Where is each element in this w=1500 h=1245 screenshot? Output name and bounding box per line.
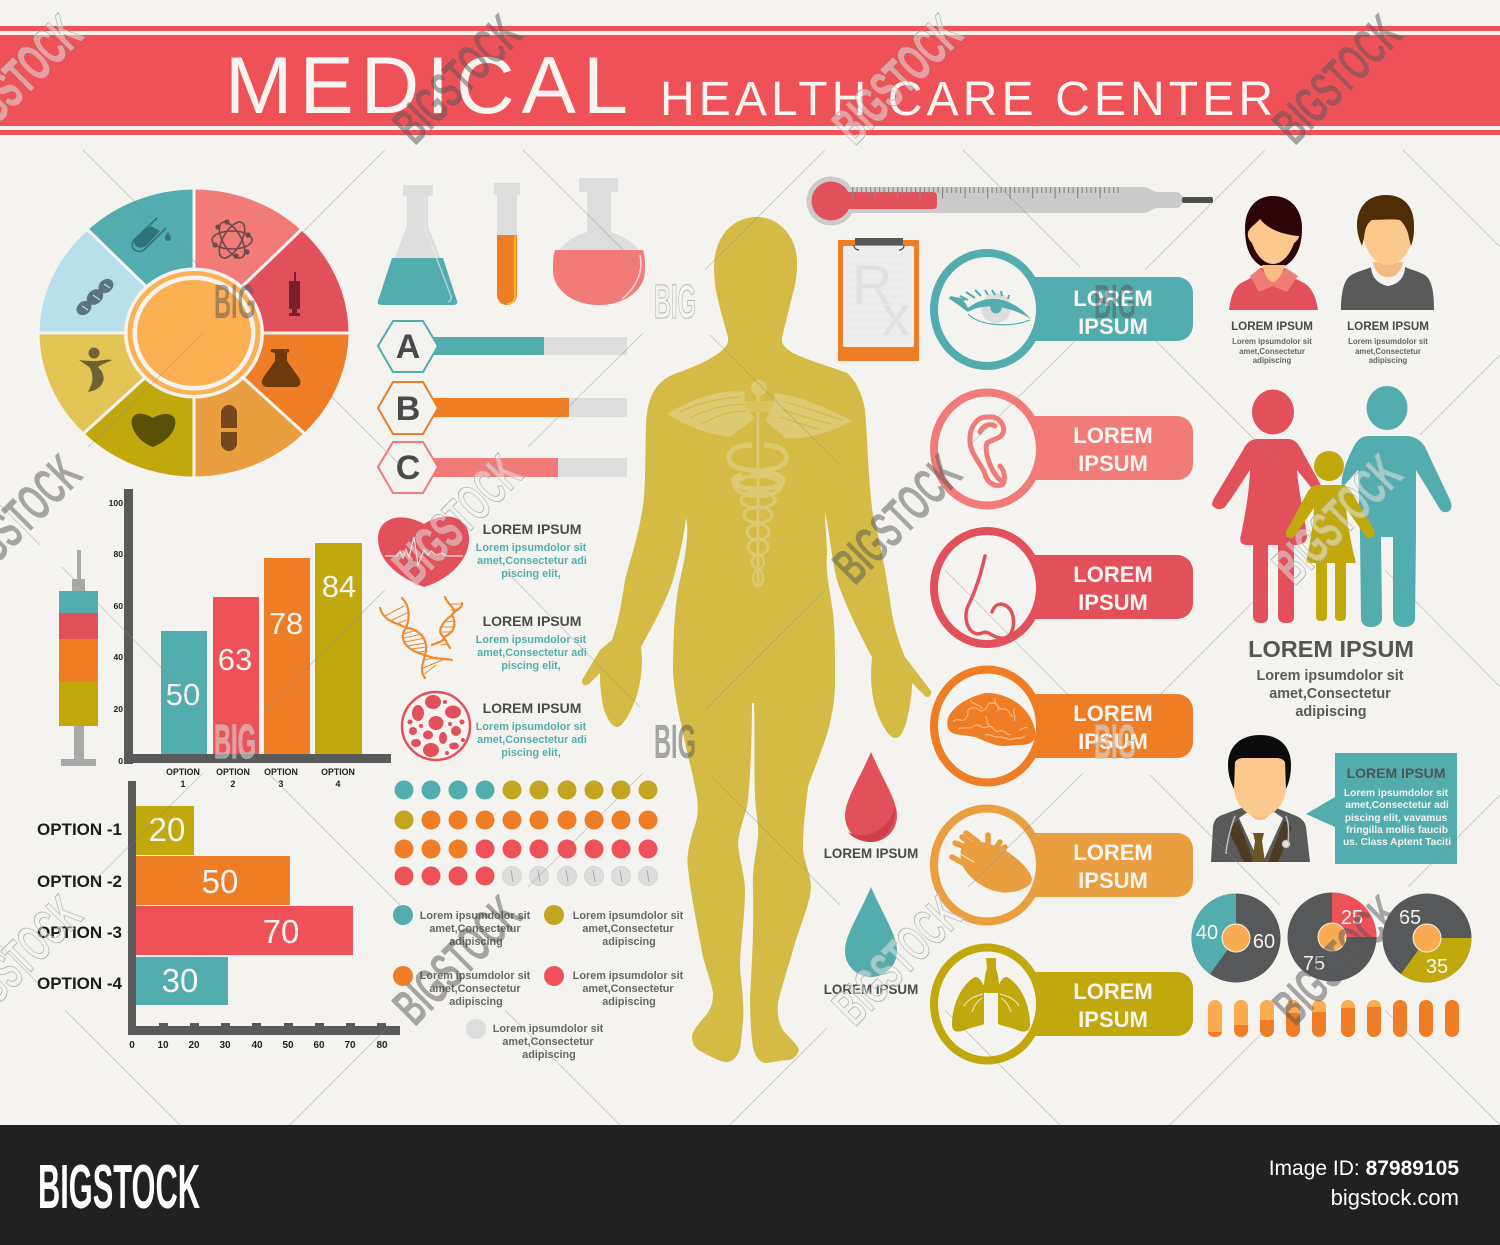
text block: dna — [476, 613, 587, 672]
legend: olive: Lorem ipsumdolor sit — [573, 910, 684, 922]
human body silhouette with caduceus — [582, 217, 931, 1063]
family pictogram: amet,Consectetur — [1269, 686, 1391, 702]
icon: atom — [212, 218, 252, 262]
icon: brain — [947, 693, 1035, 746]
man avatar: amet,Consectetur — [1355, 347, 1421, 356]
vertical bar chart: OPTION — [216, 767, 250, 777]
figure: mother — [1212, 390, 1322, 623]
text block: cell: Lorem ipsumdolor sit — [476, 721, 587, 733]
title banner — [0, 26, 1500, 135]
syringe gauge — [59, 550, 98, 766]
progress bar C: C — [396, 449, 420, 487]
text block: cell: LOREM IPSUM — [483, 700, 581, 716]
family pictogram: LOREM IPSUM — [1248, 636, 1414, 662]
legend: red: Lorem ipsumdolor sit — [573, 970, 684, 982]
horizontal bar chart: 30 — [162, 962, 198, 999]
horizontal bar chart: 70 — [263, 913, 299, 950]
man avatar: LOREM IPSUM — [1347, 320, 1429, 333]
woman avatar: LOREM IPSUM — [1231, 320, 1313, 333]
clipboard prescription — [838, 238, 919, 361]
legend: olive — [544, 905, 684, 948]
pie chart 25/75: 75 — [1303, 953, 1325, 975]
vertical bar chart: 1 — [181, 779, 186, 789]
watermark overlay: BIG — [654, 716, 696, 769]
horizontal bar chart: 20 — [149, 811, 185, 848]
footer site url: bigstock.com — [1331, 1185, 1459, 1210]
legend: orange: adipiscing — [449, 996, 503, 1008]
man avatar: adipiscing — [1369, 356, 1408, 365]
badge: heart organ — [934, 808, 1193, 922]
watermark overlay: BIG — [214, 716, 256, 769]
icon: syringe — [289, 272, 300, 316]
badge: nose: IPSUM — [1078, 590, 1148, 615]
pie chart 25/75 — [1288, 892, 1376, 982]
badge: heart organ: LOREM — [1073, 840, 1153, 865]
family pictogram — [1212, 386, 1451, 720]
vertical bar chart: 63 — [218, 642, 252, 677]
watermark overlay: BIG — [1094, 276, 1136, 329]
icon: heart — [132, 414, 175, 447]
figure: child — [1286, 451, 1375, 621]
legend: teal: amet,Consectetur — [429, 923, 521, 935]
man avatar — [1341, 195, 1434, 365]
horizontal bar chart: 50 — [282, 1040, 294, 1051]
watermark overlay: BIGSTOCK — [382, 444, 533, 595]
pie chart 40/60 — [1192, 894, 1280, 982]
speech callout — [1306, 753, 1457, 864]
text block: dna: LOREM IPSUM — [483, 613, 581, 629]
woman avatar: adipiscing — [1253, 356, 1292, 365]
figure: father — [1342, 386, 1451, 627]
vertical bar chart: 3 — [279, 779, 284, 789]
caduceus — [667, 380, 853, 586]
vertical bar chart: 80 — [113, 549, 123, 559]
text block: heart: LOREM IPSUM — [483, 521, 581, 537]
vertical bar chart: 100 — [109, 498, 123, 508]
badge: eye — [934, 253, 1193, 366]
watermark overlay: BIG — [1094, 716, 1136, 769]
badge: ear: IPSUM — [1078, 451, 1148, 476]
blood drop: LOREM IPSUM — [824, 846, 918, 861]
watermark overlay: BIGSTOCK — [822, 885, 973, 1036]
clipboard prescription: x — [882, 284, 910, 347]
legend: orange: Lorem ipsumdolor sit — [420, 970, 531, 982]
icon: figure — [79, 348, 112, 392]
badge: brain: IPSUM — [1078, 729, 1148, 754]
progress bar A: A — [396, 328, 420, 366]
text block: dna: Lorem ipsumdolor sit — [476, 634, 587, 646]
icon: nose — [966, 556, 1014, 638]
pill dot matrix — [394, 780, 658, 886]
badge: lungs: IPSUM — [1078, 1007, 1148, 1032]
text block: dna: amet,Consectetur adi — [477, 647, 587, 659]
vertical bar chart: OPTION — [264, 767, 298, 777]
watermark overlay: BIGSTOCK — [1262, 444, 1413, 595]
woman avatar: Lorem ipsumdolor sit — [1232, 337, 1312, 346]
lab round flask — [553, 178, 645, 305]
vertical bar chart: 60 — [113, 601, 123, 611]
woman avatar — [1229, 196, 1318, 365]
horizontal bar chart: OPTION -3 — [37, 923, 122, 942]
icon: lungs — [952, 958, 1030, 1032]
legend: white: amet,Consectetur — [502, 1036, 594, 1048]
pie chart 25/75: 25 — [1341, 907, 1363, 929]
family pictogram: Lorem ipsumdolor sit — [1256, 668, 1404, 684]
text block: dna: piscing elit, — [501, 660, 561, 672]
badge: eye: LOREM — [1073, 286, 1153, 311]
watermark overlay: BIGSTOCK — [1262, 885, 1413, 1036]
legend: red: amet,Consectetur — [582, 983, 674, 995]
badge: ear — [934, 392, 1193, 506]
legend: red: adipiscing — [602, 996, 656, 1008]
text block: cell — [476, 700, 587, 759]
badge: brain — [934, 670, 1193, 782]
badge: lungs — [934, 948, 1193, 1060]
water drop — [824, 887, 918, 997]
badge: nose — [934, 531, 1193, 644]
icon: eye — [948, 290, 1031, 325]
vertical bar chart: 20 — [113, 704, 123, 714]
legend: red — [544, 966, 684, 1008]
icon: ear — [970, 417, 1004, 486]
badge: nose: LOREM — [1073, 562, 1153, 587]
capsule progress row — [1208, 1000, 1459, 1037]
icon: anatomical heart — [952, 833, 1032, 892]
text block: heart: Lorem ipsumdolor sit — [476, 542, 587, 554]
thermometer — [806, 176, 1213, 226]
pie chart 40/60: 40 — [1196, 922, 1218, 944]
icon: flask — [262, 349, 300, 387]
horizontal bar chart: OPTION -2 — [37, 872, 122, 891]
doctor avatar — [1211, 735, 1310, 862]
horizontal bar chart: 80 — [376, 1040, 388, 1051]
vertical bar chart: OPTION — [321, 767, 355, 777]
speech callout: us. Class Aptent Taciti — [1343, 837, 1451, 848]
pie chart 40/60: 60 — [1253, 931, 1275, 953]
footer bar: BIGSTOCK — [38, 1153, 200, 1222]
legend: teal — [393, 905, 531, 948]
clipboard prescription: R — [852, 253, 892, 316]
horizontal bar chart — [37, 781, 400, 1051]
vertical bar chart: 0 — [118, 756, 123, 766]
legend: orange — [393, 966, 531, 1008]
watermark overlay: BIG — [214, 276, 256, 329]
woman avatar: amet,Consectetur — [1239, 347, 1305, 356]
watermark overlay: BIGSTOCK — [382, 885, 533, 1036]
progress bar B — [378, 382, 627, 434]
vertical bar chart: 2 — [231, 779, 236, 789]
legend: white — [466, 1019, 604, 1061]
blood drop — [824, 752, 918, 861]
legend: olive: adipiscing — [602, 936, 656, 948]
vertical bar chart: 4 — [336, 779, 341, 789]
badge: lungs: LOREM — [1073, 979, 1153, 1004]
badge: brain: LOREM — [1073, 701, 1153, 726]
title: medical: MEDICAL — [225, 41, 628, 131]
lab test tube — [494, 183, 520, 305]
footer image id: Image ID: 87989105 — [1269, 1157, 1459, 1180]
vertical bar chart: 84 — [322, 569, 356, 604]
horizontal bar chart: 30 — [219, 1040, 231, 1051]
vertical bar chart: 78 — [269, 606, 303, 641]
text block: heart: piscing elit, — [501, 568, 561, 580]
horizontal bar chart: 10 — [157, 1040, 169, 1051]
horizontal bar chart: 40 — [251, 1040, 263, 1051]
vertical bar chart: 40 — [113, 652, 123, 662]
stethoscope — [1226, 816, 1290, 854]
legend: white: Lorem ipsumdolor sit — [493, 1023, 604, 1035]
lab flask: conical — [378, 185, 457, 305]
text block: cell: piscing elit, — [501, 747, 561, 759]
badge: heart organ: IPSUM — [1078, 868, 1148, 893]
speech callout: amet,Consectetur adi — [1345, 800, 1449, 811]
vertical bar chart — [109, 489, 391, 789]
horizontal bar chart: OPTION -4 — [37, 974, 123, 993]
text block: heart — [476, 521, 587, 580]
legend: teal: adipiscing — [449, 936, 503, 948]
badge: eye: IPSUM — [1078, 314, 1148, 339]
speech callout: piscing elit, vavamus — [1345, 813, 1448, 824]
speech callout: Lorem ipsumdolor sit — [1344, 788, 1449, 799]
horizontal bar chart: OPTION -1 — [37, 820, 122, 839]
man avatar: Lorem ipsumdolor sit — [1348, 337, 1428, 346]
watermark overlay: BIGSTOCK — [822, 444, 973, 595]
legend: orange: amet,Consectetur — [429, 983, 521, 995]
progress bar B: B — [396, 390, 420, 428]
water drop: LOREM IPSUM — [824, 982, 918, 997]
badge: ear: LOREM — [1073, 423, 1153, 448]
legend: teal: Lorem ipsumdolor sit — [420, 910, 531, 922]
icon: dna strands — [380, 597, 462, 678]
speech callout: LOREM IPSUM — [1347, 765, 1445, 781]
watermark overlay: BIG — [654, 276, 696, 329]
horizontal bar chart: 60 — [313, 1040, 325, 1051]
text block: cell: amet,Consectetur adi — [477, 734, 587, 746]
pie chart 65/35: 65 — [1399, 907, 1421, 929]
horizontal bar chart: 20 — [188, 1040, 200, 1051]
icon: heart with ecg — [378, 517, 469, 587]
legend: white: adipiscing — [522, 1049, 576, 1061]
icon: test tube — [132, 218, 171, 251]
subtitle: health care center: HEALTH CARE CENTER — [660, 73, 1273, 126]
icon: blood cell — [402, 692, 470, 760]
vertical bar chart: 50 — [166, 677, 200, 712]
pie chart 65/35 — [1382, 894, 1472, 982]
horizontal bar chart: 50 — [202, 863, 238, 900]
speech callout: fringilla mollis faucib — [1346, 825, 1448, 836]
vertical bar chart: OPTION — [166, 767, 200, 777]
icon: pill — [221, 405, 237, 451]
pie chart 65/35: 35 — [1426, 956, 1448, 978]
family pictogram: adipiscing — [1295, 704, 1367, 720]
progress bar A — [378, 321, 627, 372]
text block: heart: amet,Consectetur adi — [477, 555, 587, 567]
legend: olive: amet,Consectetur — [582, 923, 674, 935]
icon: dna — [74, 276, 116, 318]
segmented icon wheel — [38, 188, 350, 478]
horizontal bar chart: 70 — [344, 1040, 356, 1051]
progress bar C — [378, 442, 627, 493]
footer bar — [0, 1125, 1500, 1245]
horizontal bar chart: 0 — [129, 1040, 135, 1051]
